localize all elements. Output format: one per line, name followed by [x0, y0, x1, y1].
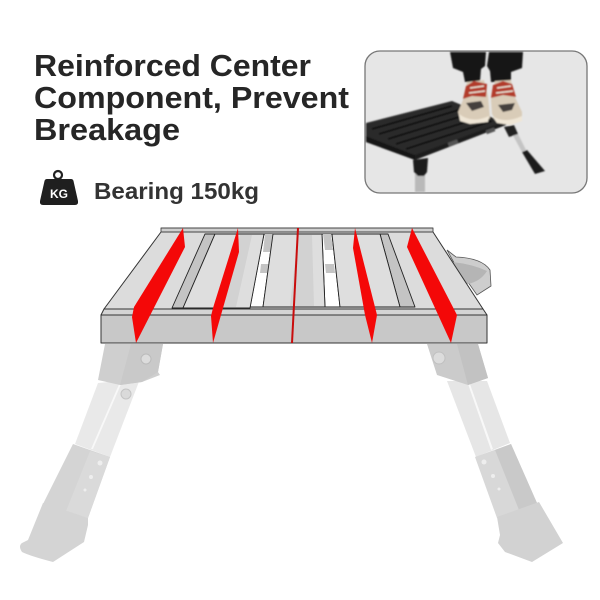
bearing capacity label: Bearing 150kg	[94, 178, 259, 204]
deck top surface	[104, 232, 483, 309]
left leg tube	[75, 379, 140, 457]
rib 2	[211, 228, 239, 343]
right leg sleeve	[475, 444, 537, 518]
rib 3	[291, 228, 299, 343]
right leg (faded)	[427, 344, 563, 562]
left leg sleeve	[43, 444, 110, 518]
side handle	[447, 250, 491, 295]
photo: stool leg	[413, 158, 428, 192]
photo: right sneaker	[491, 80, 522, 125]
title: Reinforced Center	[34, 48, 311, 83]
front face	[101, 315, 487, 343]
front rail top	[101, 309, 487, 315]
back rail	[161, 228, 433, 232]
left leg foot	[20, 503, 88, 562]
rib 5	[407, 228, 457, 343]
title: Component, Prevent	[34, 80, 349, 115]
icon: KG weight: KG	[50, 187, 68, 201]
stool deck	[101, 228, 487, 343]
title	[34, 48, 349, 147]
gaps under deck	[172, 234, 215, 308]
icon: KG weight	[40, 171, 78, 205]
red reinforcement ribs	[132, 228, 457, 343]
left leg bracket	[98, 344, 163, 385]
left leg (faded)	[20, 344, 163, 562]
right leg tube	[447, 381, 510, 457]
title: Breakage	[34, 112, 180, 147]
panel: photo of feet on step stool	[365, 51, 587, 193]
plank shading	[263, 234, 325, 307]
photo: black trousers	[450, 52, 523, 82]
right leg foot	[497, 502, 563, 562]
photo: left sneaker	[458, 80, 490, 124]
rib 1	[132, 228, 185, 343]
photo: folded rear leg	[504, 125, 545, 174]
photo: black platform	[366, 101, 508, 160]
rib 4	[353, 228, 377, 343]
right leg bracket	[427, 344, 488, 385]
